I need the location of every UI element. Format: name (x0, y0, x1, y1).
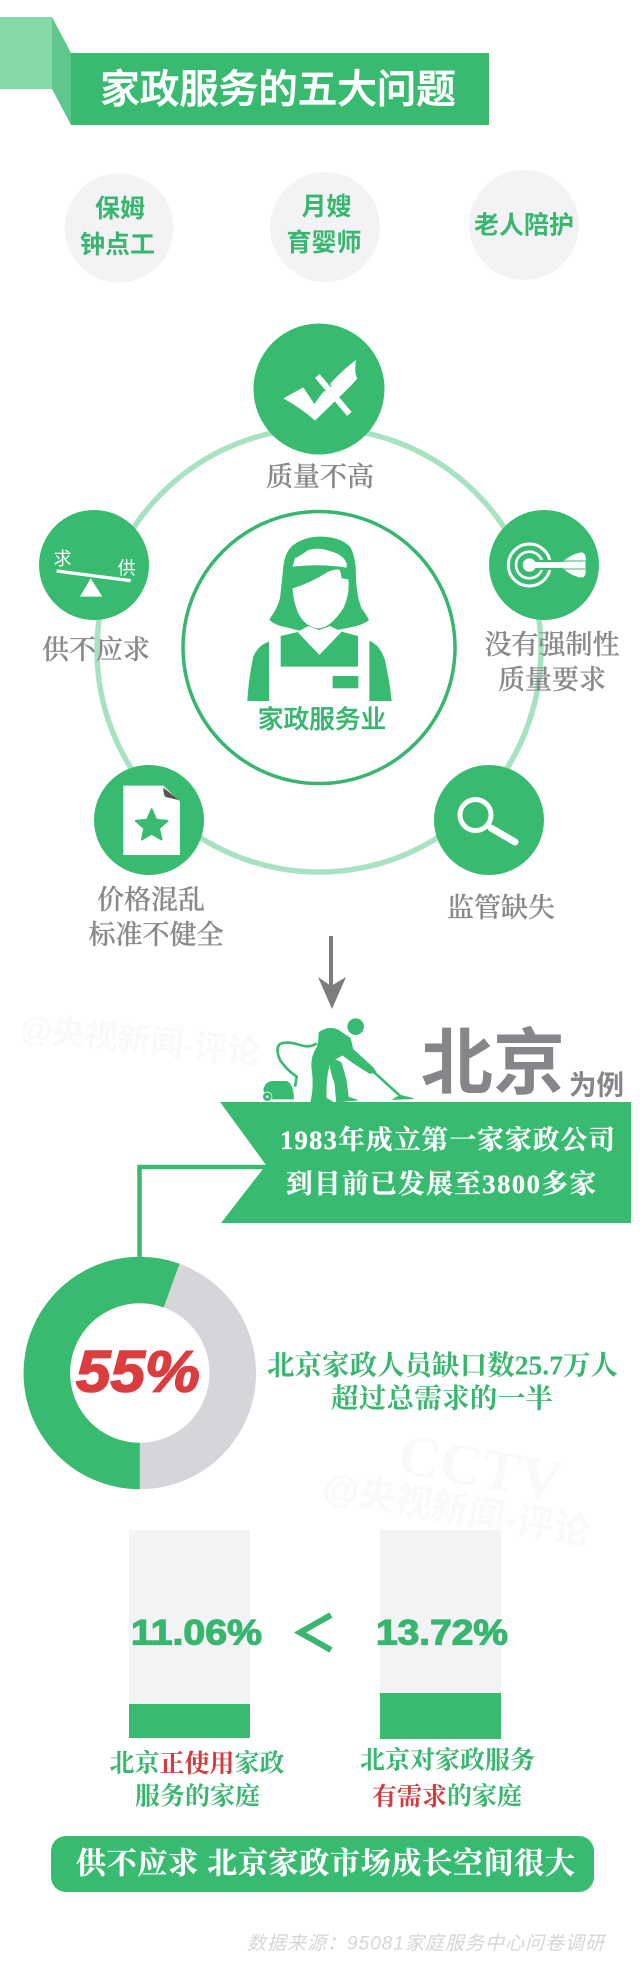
problem: chaotic prices and incomplete standards: 价格混乱 (97, 885, 205, 915)
icon: person vacuuming (263, 1018, 413, 1102)
watermark: lower: @央视新闻-评论 (320, 1466, 593, 1553)
category circles (64, 170, 579, 282)
icon: target with dart (508, 544, 586, 586)
category: maternity matron: 育婴师 (286, 228, 362, 257)
category: maternity matron: 月嫂 (301, 193, 352, 221)
centre circle: domestic service industry (183, 512, 455, 784)
icon: check mark with cross (283, 360, 357, 421)
bar: using service (129, 1530, 262, 1738)
donut chart 55%: 55% (76, 1340, 200, 1404)
banner: company history: 到目前已发展至3800多家 (286, 1169, 596, 1199)
bar: using service: 11.06% (131, 1614, 262, 1652)
donut description: 北京家政人员缺口数25.7万人 (267, 1350, 618, 1380)
title ribbon: 家政服务的五大问题 (100, 68, 456, 112)
category: elderly care (469, 170, 579, 280)
category: maternity matron (270, 172, 380, 282)
bar label: right: 北京对家政服务 (360, 1746, 535, 1774)
icon: magnifying glass (460, 800, 515, 842)
donut description: 超过总需求的一半 (331, 1382, 553, 1414)
banner: company history (220, 1102, 631, 1223)
five problems diagram (39, 324, 620, 950)
problem: supply short of demand: 供不应求 (42, 635, 150, 665)
problem: chaotic prices and incomplete standards (88, 765, 224, 950)
data source: 数据来源：95081家庭服务中心问卷调研 (247, 1932, 607, 1954)
bar label: left: 服务的家庭 (135, 1782, 260, 1810)
problem: no mandatory quality requirements (484, 510, 620, 695)
problem: chaotic prices and incomplete standards: 标准不健全 (88, 920, 224, 950)
problem: low quality: 质量不高 (266, 462, 374, 492)
heading: Beijing as example: 北京 (421, 1024, 565, 1104)
bar label: right: 有需求的家庭 (372, 1782, 522, 1810)
problem: lack of supervision (434, 765, 555, 923)
category: elderly care: 老人陪护 (474, 212, 574, 240)
icon: housekeeper (247, 537, 392, 701)
icon: balance scale: 供 (118, 558, 136, 578)
problem: low quality (254, 324, 384, 492)
icon: balance scale (54, 549, 136, 597)
icon: document with star (123, 786, 180, 855)
title ribbon (0, 17, 489, 125)
bar: needing service (376, 1530, 508, 1739)
symbol: less than (300, 1615, 331, 1650)
heading: Beijing as example: 为例 (569, 1070, 624, 1100)
donut description (267, 1350, 618, 1414)
icon: balance scale: 求 (54, 549, 72, 569)
problem: supply short of demand (39, 510, 150, 665)
problem: lack of supervision: 监管缺失 (447, 893, 555, 923)
category: nanny and hourly worker: 保姆 (95, 195, 145, 223)
banner: company history: 1983年成立第一家家政公司 (280, 1125, 615, 1155)
bar: needing service: 13.72% (376, 1614, 508, 1652)
centre circle: domestic service industry: 家政服务业 (258, 705, 386, 734)
conclusion pill (51, 1836, 594, 1892)
category: nanny and hourly worker (64, 174, 174, 282)
watermark: lower (320, 1409, 603, 1553)
donut green segment (47, 1280, 172, 1466)
donut chart 55% (47, 1280, 233, 1466)
problem: no mandatory quality requirements: 质量要求 (498, 665, 606, 695)
bar label: left: 北京正使用家政 (109, 1748, 285, 1778)
bar label: left (109, 1748, 285, 1810)
watermark: lower: CCTV (394, 1421, 567, 1513)
bar label: right (360, 1746, 535, 1810)
connector line (140, 1167, 268, 1260)
watermark: upper: @央视新闻-评论 (18, 1009, 262, 1071)
arrow down (318, 936, 346, 1009)
bar comparison (109, 1530, 535, 1810)
conclusion pill: 供不应求 北京家政市场成长空间很大 (76, 1848, 575, 1880)
category: nanny and hourly worker: 钟点工 (80, 231, 155, 259)
problem: no mandatory quality requirements: 没有强制性 (484, 630, 620, 660)
